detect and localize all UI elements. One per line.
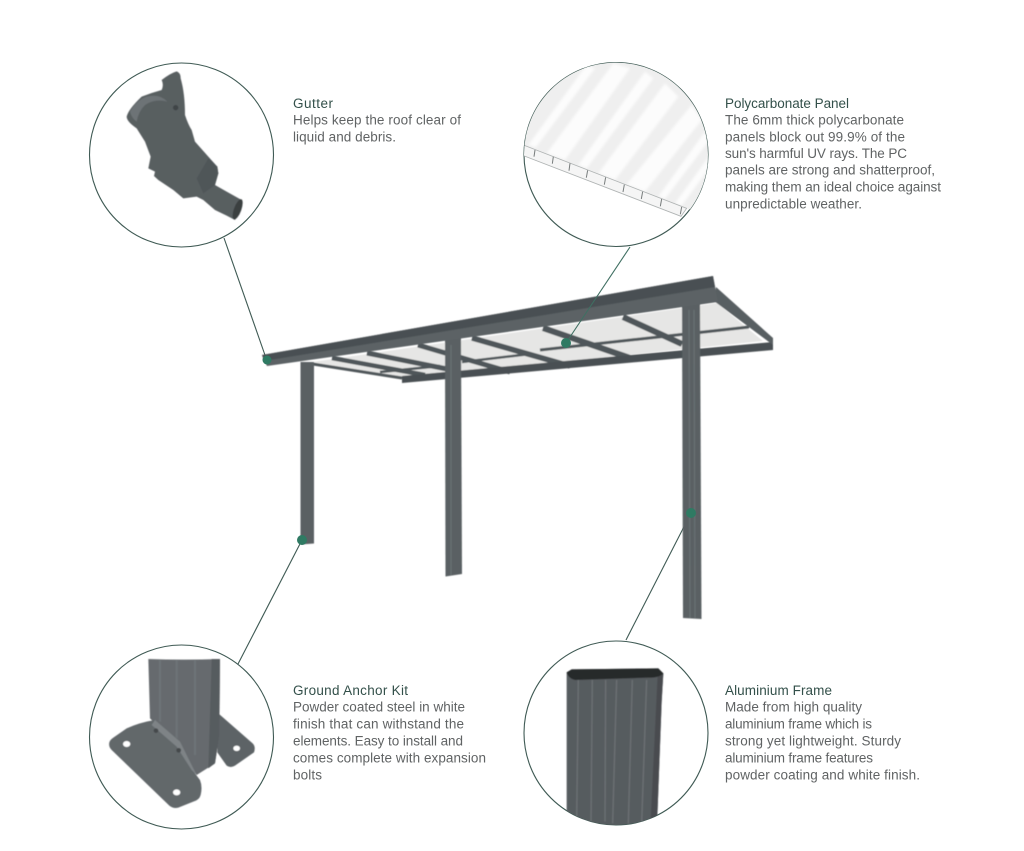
leader line: ground anchor kit <box>238 540 302 664</box>
text block: aluminium frame: aluminium frame features <box>725 750 873 766</box>
text block: polycarbonate panel: unpredictable weather. <box>725 196 862 212</box>
marker dot: ground anchor kit <box>297 535 307 545</box>
panel: aluminium frame callout <box>524 641 708 835</box>
text block: gutter <box>293 96 461 144</box>
back post <box>300 362 314 544</box>
text block: aluminium frame <box>725 683 920 782</box>
gutter circle outline <box>90 63 274 247</box>
marker dot: gutter <box>262 356 272 364</box>
icon: ground anchor bracket <box>109 659 255 808</box>
main illustration: patio cover structure <box>262 276 773 619</box>
text block: aluminium frame: strong yet lightweight. Sturdy <box>725 734 901 748</box>
leader line: aluminium frame <box>626 513 691 640</box>
side beam <box>714 287 773 345</box>
panel: ground anchor callout <box>90 645 274 829</box>
front post <box>682 304 702 619</box>
text block: aluminium frame: Made from high quality <box>725 700 862 714</box>
text block: gutter: Gutter <box>293 96 334 111</box>
text block: ground anchor kit <box>293 683 486 782</box>
rear plate <box>217 713 255 767</box>
polycarbonate circle outline <box>524 62 708 246</box>
panel: gutter callout <box>90 63 274 247</box>
text block: polycarbonate panel <box>725 96 941 212</box>
ground anchor circle outline <box>90 645 274 829</box>
roof rafters <box>313 317 749 378</box>
text block: ground anchor kit: finish that can withstand the <box>293 716 464 732</box>
text block: polycarbonate panel: panels block out 99.9% of the <box>725 130 905 144</box>
front lower beam <box>402 342 773 383</box>
front plate <box>109 720 202 808</box>
leader line: gutter <box>224 238 266 358</box>
middle post <box>445 338 462 576</box>
marker dot: aluminium frame <box>686 508 696 518</box>
text block: gutter: liquid and debris. <box>293 130 396 144</box>
marker dot: polycarbonate panel <box>561 338 571 348</box>
text block: gutter: Helps keep the roof clear of <box>293 112 461 128</box>
icon: aluminium post section <box>567 668 663 835</box>
text block: aluminium frame: aluminium frame which is <box>725 716 872 732</box>
text block: ground anchor kit: elements. Easy to install and <box>293 734 463 748</box>
opening <box>567 668 663 680</box>
post <box>148 659 220 775</box>
text block: ground anchor kit: comes complete with expansion <box>293 750 486 766</box>
text block: aluminium frame: powder coating and white finish. <box>725 768 920 782</box>
text block: polycarbonate panel: panels are strong and shatterproof, <box>725 162 935 178</box>
text block: ground anchor kit: bolts <box>293 768 322 782</box>
sheet edge <box>522 144 687 216</box>
panel: polycarbonate callout <box>522 55 715 246</box>
text block: polycarbonate panel: making them an ideal choice against <box>725 180 941 194</box>
text block: aluminium frame: Aluminium Frame <box>725 683 832 698</box>
text block: polycarbonate panel: sun's harmful UV rays. The PC <box>725 146 907 161</box>
text block: polycarbonate panel: Polycarbonate Panel <box>725 96 849 111</box>
text block: ground anchor kit: Ground Anchor Kit <box>293 683 408 698</box>
text block: ground anchor kit: Powder coated steel in white <box>293 700 465 714</box>
main gutter beam <box>262 276 718 366</box>
leader line: polycarbonate panel <box>566 247 630 343</box>
aluminium frame circle outline <box>524 641 708 825</box>
text block: polycarbonate panel: The 6mm thick polycarbonate <box>725 112 904 128</box>
icon: polycarbonate sheet <box>522 55 715 218</box>
roof panels <box>312 303 763 378</box>
icon: gutter part <box>127 71 245 221</box>
